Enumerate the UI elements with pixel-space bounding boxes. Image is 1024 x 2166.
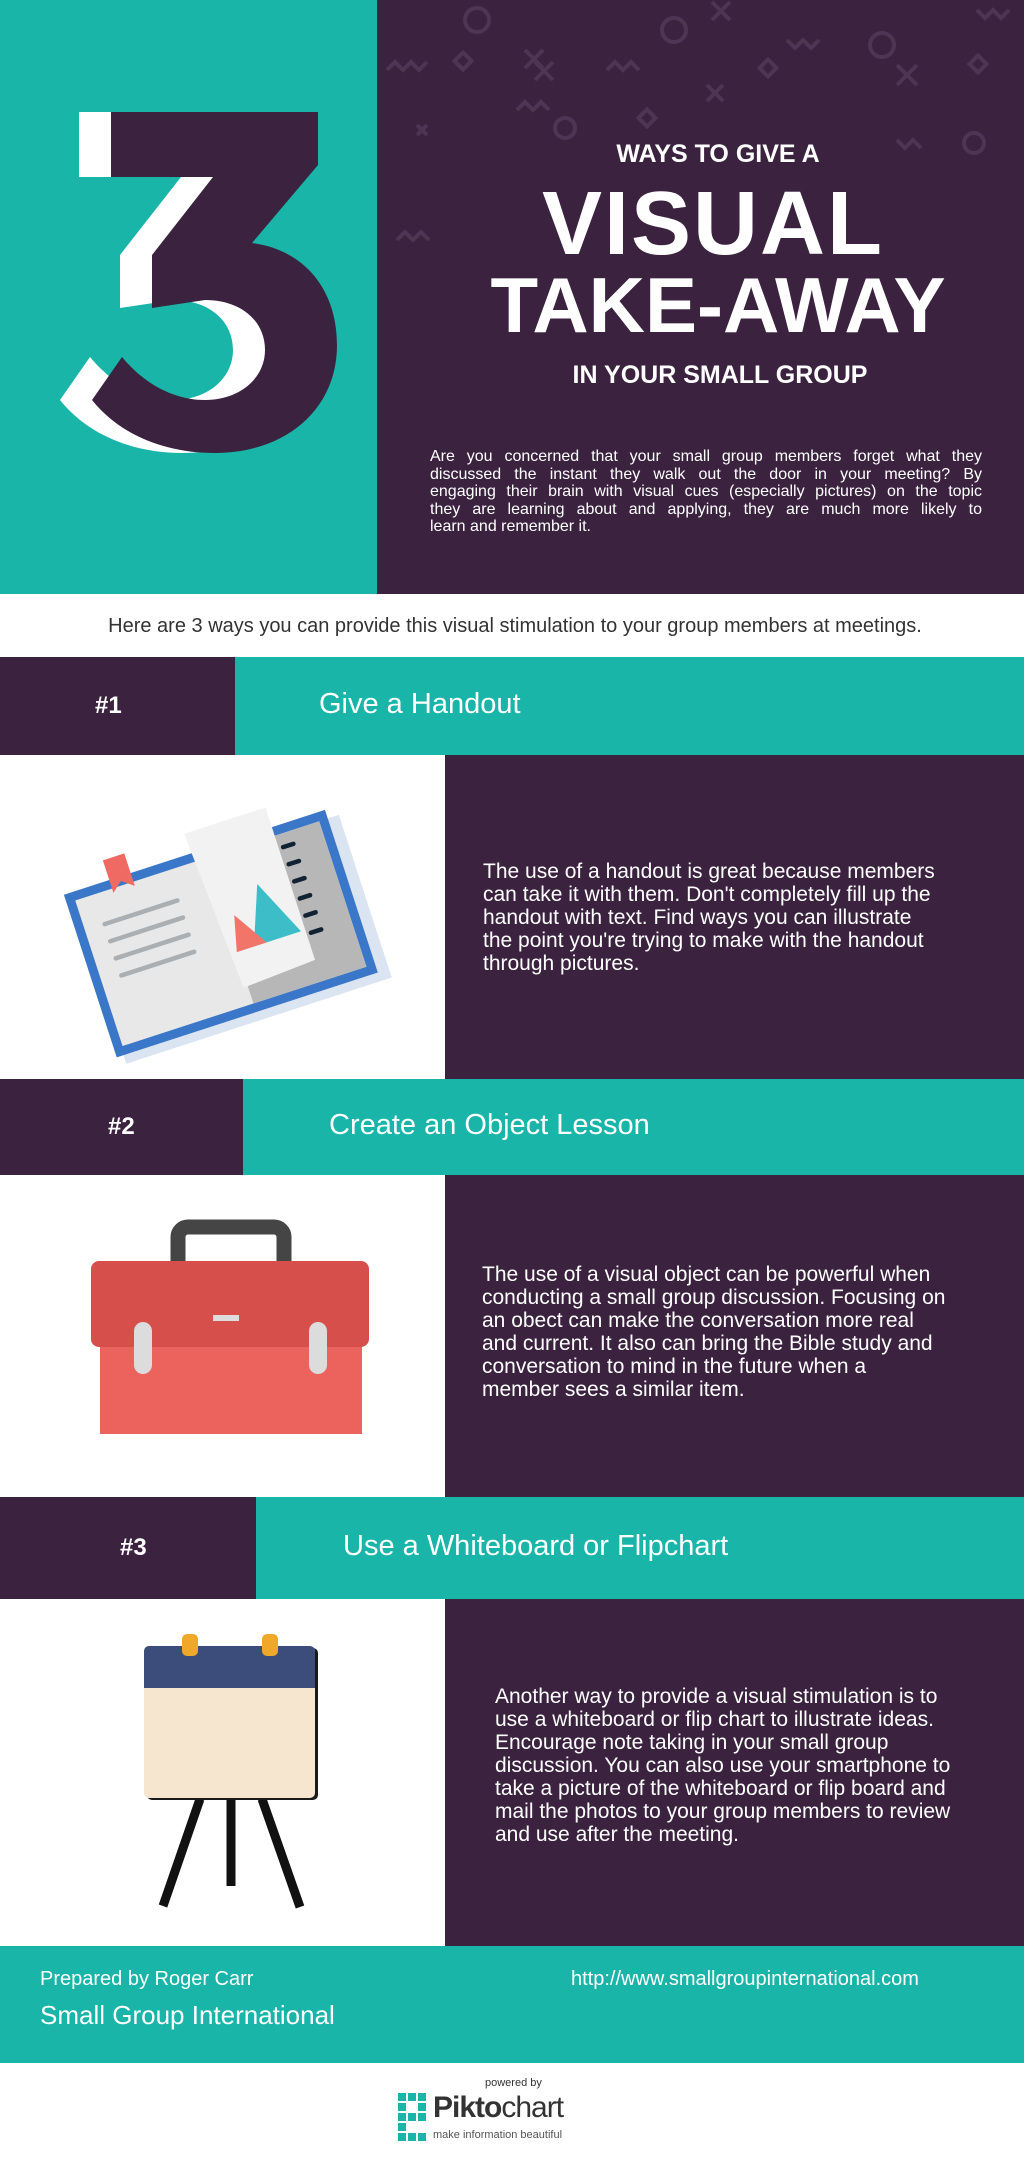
text block 3: mail the photos to your group members to review bbox=[495, 1800, 950, 1823]
text block 2: an obect can make the conversation more real bbox=[482, 1309, 914, 1332]
text block 1: the point you're trying to make with the handout bbox=[483, 929, 924, 952]
intro paragraph: learn and remember it. bbox=[430, 518, 591, 535]
footer bbox=[0, 1946, 1024, 2063]
piktochart logo: powered by bbox=[485, 2077, 542, 2089]
text block 3: discussion. You can also use your smartphone to bbox=[495, 1754, 950, 1777]
intro paragraph: engaging their brain with visual cues (especially pictures) on the topic bbox=[430, 483, 982, 500]
icon: toolbox bbox=[91, 1220, 369, 1434]
title: VISUAL bbox=[542, 174, 884, 274]
text block 2: conducting a small group discussion. Focusing on bbox=[482, 1286, 945, 1309]
title bbox=[490, 140, 946, 389]
panel: section 1 bbox=[64, 755, 1024, 1079]
title: TAKE-AWAY bbox=[490, 261, 946, 349]
intro paragraph: Are you concerned that your small group members forget what they bbox=[430, 448, 982, 465]
text block 3: Encourage note taking in your small group bbox=[495, 1731, 888, 1754]
number #3: #3 bbox=[120, 1534, 147, 1561]
text block 3: Another way to provide a visual stimulation is to bbox=[495, 1685, 937, 1708]
text block 2: member sees a similar item. bbox=[482, 1378, 745, 1401]
heading: Create an Object Lesson: Create an Object Lesson bbox=[329, 1109, 650, 1141]
text block 1: through pictures. bbox=[483, 952, 639, 975]
piktochart logo: Piktochart bbox=[433, 2091, 563, 2124]
text block 1: can take it with them. Don't completely fill up the bbox=[483, 883, 931, 906]
band #3 bbox=[0, 1497, 1024, 1599]
text block 2: conversation to mind in the future when a bbox=[482, 1355, 866, 1378]
band #1 bbox=[0, 657, 1024, 755]
text block 2: and current. It also can bring the Bible study and bbox=[482, 1332, 933, 1355]
header purple block bbox=[377, 0, 1024, 594]
text block 2 bbox=[445, 1175, 1024, 1497]
text block 3: and use after the meeting. bbox=[495, 1823, 739, 1846]
panel: section 3 bbox=[144, 1599, 1024, 1946]
piktochart logo: make information beautiful bbox=[433, 2129, 562, 2141]
text block 3 bbox=[445, 1599, 1024, 1946]
header panel bbox=[0, 0, 1024, 594]
big number 3 bbox=[60, 112, 337, 453]
text block 2: The use of a visual object can be powerful when bbox=[482, 1263, 930, 1286]
decorative pattern bbox=[386, 1, 1010, 242]
heading: Use a Whiteboard or Flipchart: Use a Whiteboard or Flipchart bbox=[343, 1530, 728, 1562]
intro paragraph: they are learning about and applying, they are much more likely to bbox=[430, 500, 982, 518]
intro paragraph bbox=[430, 448, 982, 535]
organization name: Small Group International bbox=[40, 2000, 335, 2030]
piktochart logo bbox=[398, 2077, 564, 2141]
text block 1: The use of a handout is great because members bbox=[483, 860, 935, 883]
panel: section 2 bbox=[91, 1175, 1024, 1497]
intro paragraph: discussed the instant they walk out the door in your meeting? By bbox=[430, 466, 982, 482]
number #1: #1 bbox=[95, 692, 122, 719]
title: IN YOUR SMALL GROUP bbox=[573, 361, 867, 389]
text block 1: handout with text. Find ways you can illustrate bbox=[483, 906, 911, 929]
band #2 bbox=[0, 1079, 1024, 1175]
icon: handout book bbox=[64, 808, 392, 1064]
heading: Give a Handout: Give a Handout bbox=[319, 688, 521, 720]
url: http://www.smallgroupinternational.com bbox=[571, 1968, 919, 1990]
header teal block bbox=[0, 0, 377, 594]
number #2: #2 bbox=[108, 1113, 135, 1140]
text block 1 bbox=[445, 755, 1024, 1079]
credit text: Prepared by Roger Carr bbox=[40, 1968, 253, 1990]
intro line: Here are 3 ways you can provide this visual stimulation to your group members at meetings. bbox=[108, 615, 922, 637]
text block 3: take a picture of the whiteboard or flip board and bbox=[495, 1777, 946, 1800]
text block 3: use a whiteboard or flip chart to illustrate ideas. bbox=[495, 1708, 934, 1731]
icon: flipchart easel bbox=[144, 1634, 318, 1908]
title: WAYS TO GIVE A bbox=[616, 140, 820, 168]
